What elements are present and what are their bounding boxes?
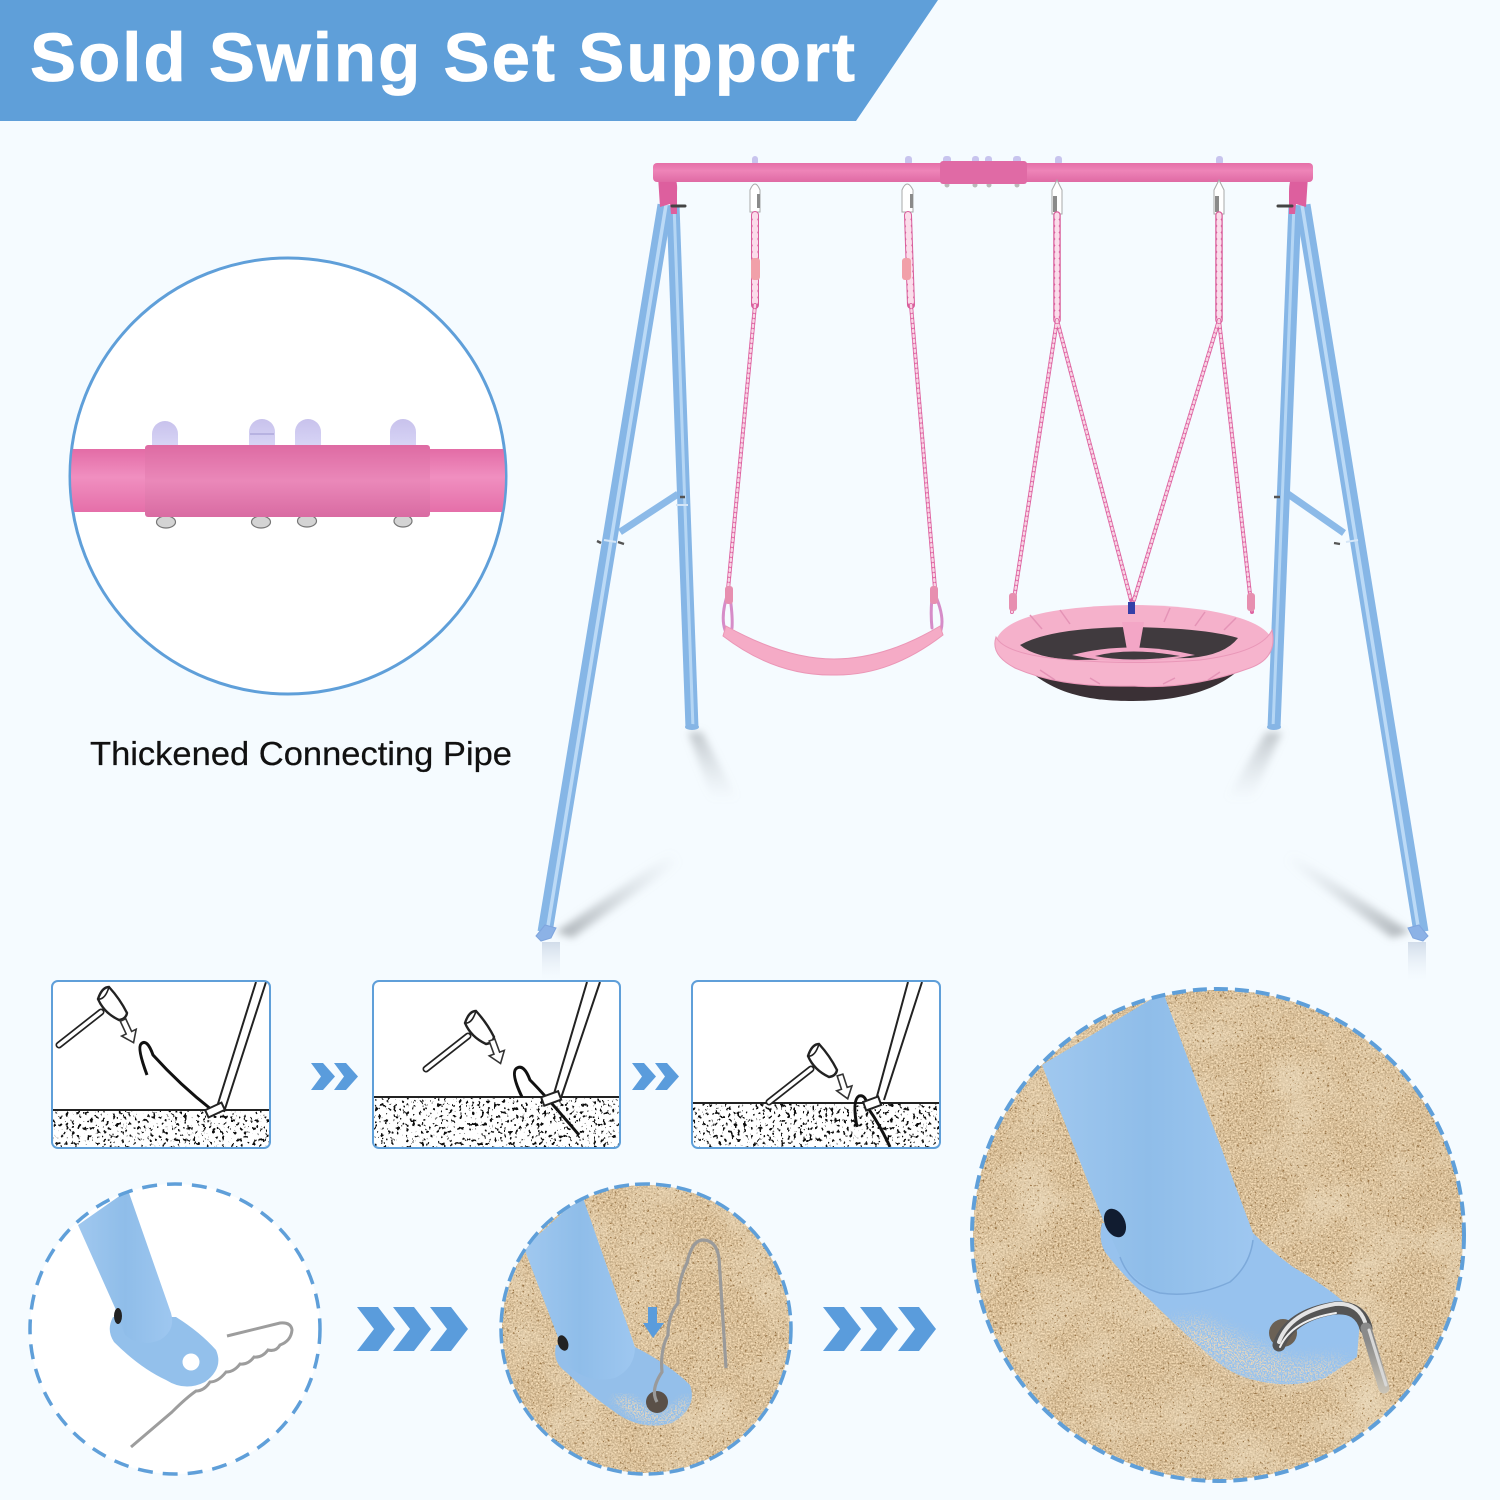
ground shadows bbox=[556, 732, 1410, 938]
panel: connecting pipe close-up bbox=[60, 258, 520, 694]
panel: leg base and stake bbox=[30, 1184, 320, 1474]
arrow: stake in sand to final bbox=[823, 1307, 936, 1351]
sand texture bbox=[500, 1183, 792, 1475]
frame elbows bbox=[658, 176, 1308, 214]
arrow: step 2 to 3 bbox=[632, 1063, 679, 1090]
nest swing ropes bbox=[1009, 215, 1255, 612]
icon: stake above hole bbox=[654, 1240, 726, 1402]
title banner bbox=[0, 0, 938, 121]
panel: step 3 diagram bbox=[692, 981, 940, 1148]
icon: down arrow bbox=[643, 1307, 664, 1338]
belt swing ropes bbox=[723, 215, 942, 630]
caption: thickened connecting pipe: Thickened Connecting Pipe bbox=[90, 736, 512, 773]
sand texture bbox=[970, 986, 1466, 1484]
top beam bbox=[653, 161, 1313, 184]
belt swing seat bbox=[723, 626, 943, 675]
icon: stake bbox=[131, 1323, 292, 1447]
arrow: step 1 to 2 bbox=[311, 1063, 358, 1090]
panel: step 1 diagram bbox=[52, 981, 270, 1148]
arrow: base to stake in sand bbox=[357, 1307, 468, 1351]
icon: leg base plate bbox=[78, 1190, 218, 1387]
panel: step 2 diagram bbox=[373, 981, 620, 1148]
icon: leg base plate in sand bbox=[1042, 996, 1360, 1394]
ground texture bbox=[692, 1103, 940, 1148]
ground texture bbox=[373, 1097, 620, 1148]
swing set illustration bbox=[536, 156, 1428, 980]
icon: connecting pipe bbox=[60, 419, 520, 528]
left frame legs bbox=[536, 205, 699, 941]
right frame legs bbox=[1267, 205, 1428, 941]
top beam bolts bbox=[752, 156, 1223, 188]
swing hangers bbox=[750, 180, 1224, 214]
panel: stake fixed in sand bbox=[970, 986, 1466, 1484]
foot reflections bbox=[542, 942, 1426, 980]
icon: steel hook bbox=[1279, 1304, 1386, 1388]
ground texture bbox=[52, 1110, 270, 1148]
icon: leg in sand bbox=[526, 1200, 692, 1428]
nest swing seat bbox=[995, 602, 1273, 701]
title banner: Sold Swing Set Support bbox=[30, 19, 855, 96]
panel: stake entering sand bbox=[500, 1183, 792, 1475]
